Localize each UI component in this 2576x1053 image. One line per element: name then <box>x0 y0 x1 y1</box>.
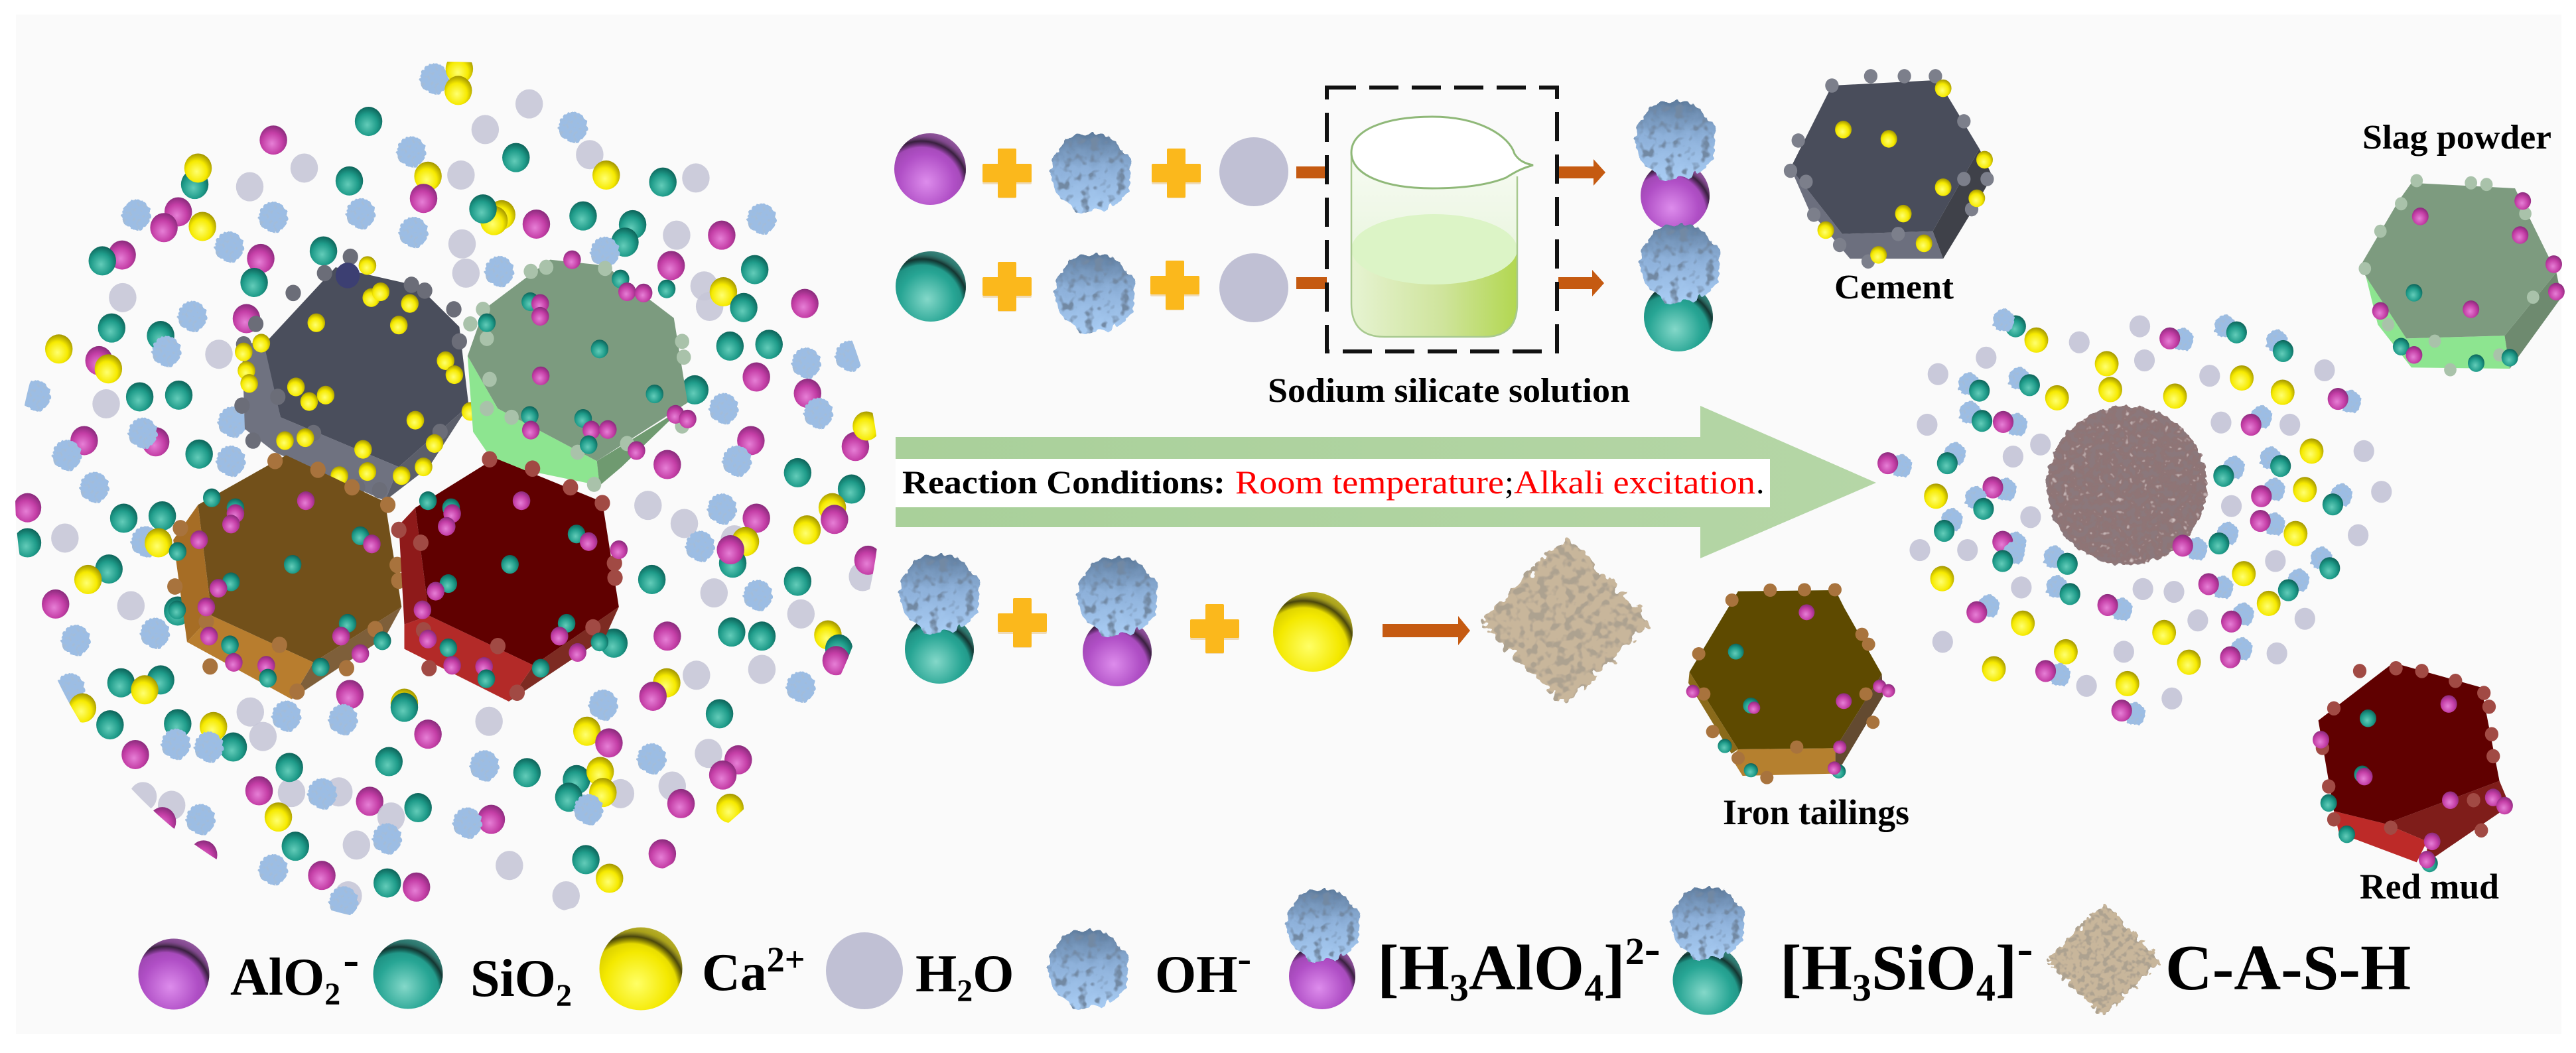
hexagon: iron tailings particle (left cluster) <box>167 453 407 700</box>
hexagon: cement <box>1784 69 1994 269</box>
legend: C-A-S-H gel <box>2055 911 2411 1009</box>
legend: aluminate: AlO <box>230 948 324 1007</box>
label: red mud: Red mud <box>2360 867 2499 906</box>
legend: hydrated silicate: - <box>2017 922 2033 975</box>
legend: hydrated silicate: [H <box>1780 932 1852 1004</box>
legend: hydrated silicate: 3 <box>1852 966 1871 1009</box>
legend: calcium <box>600 927 805 1011</box>
legend: silica <box>373 939 572 1013</box>
dashed box around beaker <box>1327 88 1557 351</box>
reaction conditions label <box>896 459 1770 507</box>
legend: hydroxide <box>1048 929 1251 1009</box>
hexagon and label group: products side <box>1686 69 2565 906</box>
hexagon group in solution <box>167 249 697 702</box>
legend <box>138 887 2411 1015</box>
legend: hydrated aluminate: 3 <box>1450 966 1469 1009</box>
hexagon: cement particle (left cluster) <box>234 249 479 501</box>
small ion overlapping gel core <box>2173 534 2208 560</box>
legend: hydroxide: OH <box>1155 946 1237 1004</box>
legend: hydrated aluminate: 2 <box>1625 930 1645 973</box>
legend: water: O <box>973 945 1014 1003</box>
hexagon: red mud <box>2313 661 2513 872</box>
label: sodium silicate solution: Sodium silicate solution <box>1268 372 1630 410</box>
legend: C-A-S-H gel: C-A-S-H <box>2165 932 2411 1004</box>
legend: hydroxide: - <box>1237 936 1251 981</box>
legend: hydrated aluminate: - <box>1645 922 1661 975</box>
legend: calcium: Ca <box>702 944 767 1002</box>
legend: aluminate: - <box>343 933 359 986</box>
legend: silica: SiO <box>470 950 556 1008</box>
hexagon: iron tailings <box>1686 583 1895 784</box>
legend: hydrated aluminate: AlO <box>1469 932 1584 1004</box>
reaction conditions label: Reaction Conditions: <box>902 464 1225 501</box>
legend: hydrated silicate <box>1671 887 2033 1015</box>
gel core sphere <box>2047 406 2206 565</box>
hexagon: slag powder <box>2358 174 2565 377</box>
reaction row 1: aluminate <box>894 100 1715 230</box>
reaction conditions label: ; <box>1505 464 1514 501</box>
legend: silica: 2 <box>556 978 572 1013</box>
legend: hydrated aluminate: [H <box>1377 932 1450 1004</box>
legend: hydrated silicate: SiO <box>1871 932 1976 1004</box>
panel: raw material particles in solution <box>14 54 882 917</box>
legend: water: 2 <box>957 973 973 1009</box>
legend: water: H <box>915 945 957 1003</box>
scattered ions and water molecules <box>14 54 882 917</box>
label: slag powder: Slag powder <box>2362 119 2551 156</box>
reaction conditions label: Alkali excitation <box>1514 464 1755 501</box>
reaction conditions label: . <box>1756 464 1765 501</box>
large reaction arrow <box>896 406 1876 558</box>
reaction row 2: silicate <box>896 223 1720 351</box>
label: cement: Cement <box>1834 269 1954 306</box>
legend: hydrated aluminate: ] <box>1603 932 1625 1004</box>
legend: calcium: 2+ <box>767 940 805 979</box>
legend: hydrated aluminate: 4 <box>1584 966 1603 1009</box>
label: iron tailings: Iron tailings <box>1723 792 1909 832</box>
hexagon: slag powder particle (left cluster) <box>463 251 697 492</box>
legend: water <box>826 932 1014 1009</box>
legend: hydrated silicate: 4 <box>1976 966 1996 1009</box>
product ions cloud around gel core <box>1877 309 2392 725</box>
reaction row 3: C-A-S-H formation <box>900 548 1639 694</box>
hexagon: red mud particle (left cluster) <box>391 451 628 702</box>
legend: aluminate: 2 <box>324 977 340 1012</box>
beaker: sodium silicate solution <box>1351 117 1533 337</box>
legend: aluminate <box>138 933 359 1012</box>
reaction conditions label: Room temperature <box>1235 464 1504 501</box>
legend: hydrated silicate: ] <box>1996 932 2017 1004</box>
legend: hydrated aluminate <box>1286 889 1661 1009</box>
